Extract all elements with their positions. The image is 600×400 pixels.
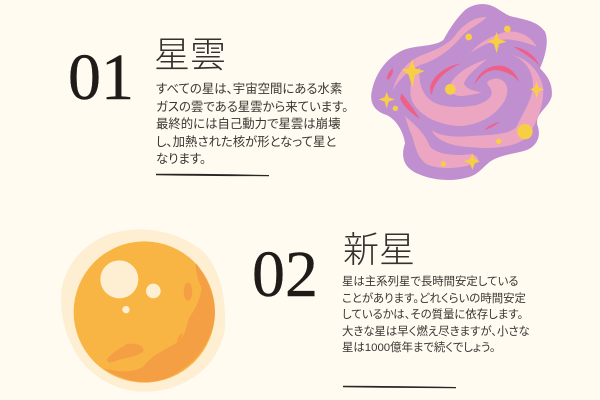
body text: nebula: なります。: [156, 152, 206, 166]
body text: nebula: ガスの雲である星雲から来ています。: [156, 100, 348, 114]
heading: new star: 新星: [343, 229, 415, 270]
number 01: 01: [68, 41, 134, 114]
body text: new star: 大きな星は早く燃え尽きますが、小さな: [342, 326, 530, 338]
body text: nebula: [156, 82, 348, 166]
body text: nebula: すべての星は、宇宙空間にある水素: [156, 82, 342, 96]
body text: new star: 星は1000億年まで続くでしょう。: [342, 342, 495, 354]
body text: new star: 星は主系列星で長時間安定している: [342, 276, 519, 288]
body text: new star: しているかは、その質量に依存します。: [342, 309, 523, 321]
body text: new star: [342, 275, 530, 354]
heading: nebula: 星雲: [154, 34, 226, 75]
number 02: 02: [252, 238, 318, 311]
body text: nebula: し、加熱された核が形となって星と: [156, 134, 336, 148]
body text: new star: ことがあります。どれくらいの時間安定: [342, 293, 526, 305]
body text: nebula: 最終的には自己動力で星雲は崩壊: [156, 117, 340, 131]
